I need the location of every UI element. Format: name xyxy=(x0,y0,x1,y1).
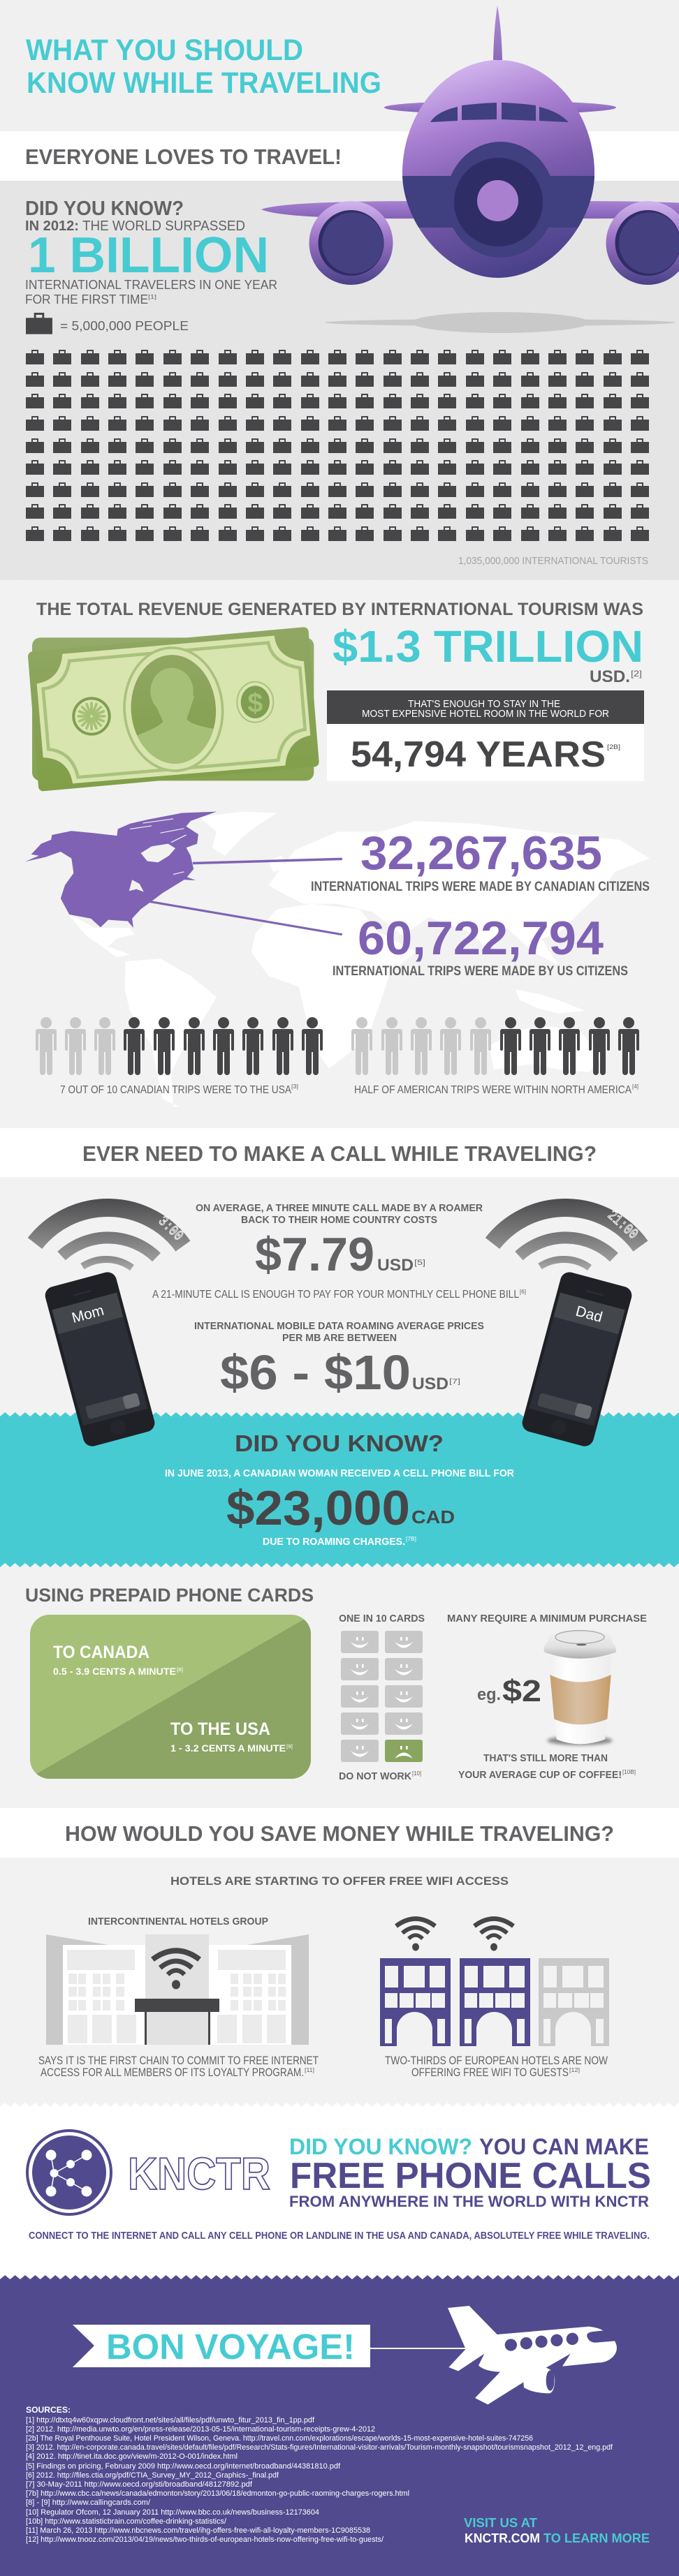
heading: total revenue: THE TOTAL REVENUE GENERATED BY INTERNATIONAL TOURISM WAS xyxy=(36,600,643,619)
caption: European hotels: [12] xyxy=(569,2067,580,2073)
icon: wifi over second building xyxy=(474,1918,513,1950)
panel: did you know roaming bill: CAD xyxy=(411,1507,455,1527)
pictogram: 7 of 10 Canadian trips xyxy=(36,1017,323,1075)
text: example price xyxy=(477,1674,541,1708)
text block: sources: [4] 2012. http://tinet.ita.doc.gov/view/m-2012-O-001/index.html xyxy=(26,2452,238,2461)
front bill xyxy=(33,632,314,787)
caption: intercontinental: [11] xyxy=(305,2067,314,2073)
chart: one in ten cards: DO NOT WORK xyxy=(339,1770,411,1782)
heading: everyone loves to travel: EVERYONE LOVES TO TRAVEL! xyxy=(25,145,342,169)
connector lines xyxy=(147,859,342,935)
chart caption: 1,035,000,000 INTERNATIONAL TOURISTS xyxy=(458,555,648,567)
title: WHAT YOU SHOULD xyxy=(26,34,303,67)
bill right seal xyxy=(237,682,273,723)
KNCTR wordmark: KNCTR xyxy=(128,2148,270,2199)
text block: sources: [11] March 26, 2013 http://www.nbcnews.com/travel/ihg-offers-free-wifi-all-loyalty-members-1C9085538 xyxy=(26,2526,370,2535)
bill left seal xyxy=(73,698,110,734)
callout: visit us: TO LEARN MORE xyxy=(543,2531,650,2545)
stat: US trips: 60,722,794 xyxy=(358,912,604,965)
airplane tail wings xyxy=(384,101,616,114)
chart: one in ten cards xyxy=(339,1613,425,1782)
caption: intercontinental: ACCESS FOR ALL MEMBERS OF ITS LOYALTY PROGRAM. xyxy=(41,2066,304,2079)
icon: left signal arcs: 3:00 xyxy=(154,1213,186,1245)
bill portrait xyxy=(119,643,228,776)
callout: free phone calls: DID YOU KNOW? xyxy=(289,2134,472,2159)
text: more than coffee: [10B] xyxy=(622,1769,636,1775)
heading: ever need to make a call: EVER NEED TO MAKE A CALL WHILE TRAVELING? xyxy=(82,1141,597,1166)
text block: sources: [2b] The Royal Penthouse Suite, Hotel President Wilson, Geneva. http://travel.cnn.com/explorations/escape/worlds-15-most-expensive-hotel-suites-747256 xyxy=(26,2434,533,2443)
icon: right signal arcs xyxy=(492,1208,641,1268)
map: world map with North America highlighted xyxy=(25,812,650,1107)
panel: prepaid card rates: [8] xyxy=(177,1668,183,1673)
text block: did you know 1 billion: [1] xyxy=(148,294,156,300)
text block: data roaming price: USD xyxy=(412,1375,448,1393)
airplane right engine xyxy=(606,201,679,285)
icon: coffee cup xyxy=(543,1629,616,1745)
panel: prepaid card rates: TO THE USA xyxy=(170,1719,270,1739)
panel: hotel room comparison: THAT'S ENOUGH TO STAY IN THE xyxy=(408,698,560,710)
callout: free phone calls: FREE PHONE CALLS xyxy=(290,2156,651,2196)
chart: European hotel buildings xyxy=(380,1958,609,2046)
panel: prepaid card rates: 0.5 - 3.9 CENTS A MINUTE xyxy=(53,1666,176,1677)
label: intercontinental: INTERCONTINENTAL HOTELS GROUP xyxy=(88,1916,268,1927)
heading: how would you save money: HOW WOULD YOU SAVE MONEY WHILE TRAVELING? xyxy=(65,1821,614,1846)
icon: suitcase legend xyxy=(26,313,52,334)
text block: data roaming price: [7] xyxy=(449,1378,460,1386)
North America highlight xyxy=(25,812,217,928)
revenue figure: $1.3 TRILLION xyxy=(333,621,643,672)
text block: did you know 1 billion: FOR THE FIRST TIME xyxy=(25,293,148,306)
text block: data roaming price: PER MB ARE BETWEEN xyxy=(282,1332,397,1344)
panel: hotel room comparison: 54,794 YEARS xyxy=(351,734,606,775)
icon: dollar bills xyxy=(32,632,314,787)
subheading: hotels wifi: HOTELS ARE STARTING TO OFFER FREE WIFI ACCESS xyxy=(170,1874,509,1888)
icon: KNCTR logo mark xyxy=(27,2131,111,2214)
heading: using prepaid phone cards: USING PREPAID PHONE CARDS xyxy=(25,1585,314,1606)
text block: three minute call cost: [5] xyxy=(414,1259,425,1267)
bill right seal: $ xyxy=(247,688,263,718)
banner tow line xyxy=(370,2348,468,2349)
text: more than coffee: THAT'S STILL MORE THAN xyxy=(483,1752,608,1764)
airplane shadow xyxy=(325,312,676,333)
text block: did you know 1 billion: THE WORLD SURPASSED xyxy=(82,219,245,234)
panel: hotel room comparison: [2B] xyxy=(607,743,620,750)
chart: one in ten cards: [10] xyxy=(412,1770,421,1777)
icon: sad card xyxy=(385,1740,423,1762)
panel: prepaid card rates: [9] xyxy=(286,1745,293,1749)
text block: sources: [5] Findings on pricing, February 2009 http://www.oecd.org/internet/broadband/44381810.pdf xyxy=(26,2462,341,2471)
icon: left signal arcs xyxy=(35,1208,186,1268)
panel: hotel room comparison xyxy=(327,690,644,781)
text block: data roaming price xyxy=(194,1320,484,1400)
caption: Canadian trips: 7 OUT OF 10 CANADIAN TRIPS WERE TO THE USA xyxy=(60,1084,291,1096)
icon: right phone xyxy=(520,1270,634,1449)
banner: bon voyage: BON VOYAGE! xyxy=(106,2327,355,2367)
text: example price: $2 xyxy=(502,1674,541,1708)
Hudson Bay, lakes and straits xyxy=(129,844,175,891)
text block: sources: SOURCES: xyxy=(26,2405,71,2415)
title: KNOW WHILE TRAVELING xyxy=(27,66,381,100)
caption: European hotels: OFFERING FREE WIFI TO GUESTS xyxy=(411,2066,569,2079)
icon: hotel wifi xyxy=(152,1950,200,1989)
text block: sources: [10] Regulator Ofcom, 12 January 2011 http://www.bbc.co.uk/news/business-12173604 xyxy=(26,2508,319,2517)
text block: did you know 1 billion: 1 BILLION xyxy=(28,228,269,283)
chart: grid of suitcases xyxy=(26,350,649,541)
text block: three minute call cost: $7.79 xyxy=(255,1228,374,1281)
text: minimum purchase: MANY REQUIRE A MINIMUM PURCHASE xyxy=(447,1613,647,1624)
stat: Canadian trips xyxy=(311,827,650,894)
text block: data roaming price: INTERNATIONAL MOBILE DATA ROAMING AVERAGE PRICES xyxy=(194,1320,484,1332)
hotel canopy xyxy=(135,1999,219,2045)
airplane main wings xyxy=(261,201,679,219)
airplane cockpit windows xyxy=(430,103,569,122)
panel: prepaid card rates xyxy=(28,1613,314,1782)
text block: sources: [7] 30-May-2011 http://www.oecd.org/sti/broadband/48127892.pdf xyxy=(26,2480,253,2489)
text block: sources: [3] 2012. http://en-corporate.canada.travel/sites/default/files/pdf/Research/Stats-figures/International-visitor-arrivals/Tourism-monthly-snapshot/tourismsnapshot_2012_12_eng.pdf xyxy=(26,2443,613,2452)
panel: did you know roaming bill xyxy=(165,1430,514,1548)
icon: right signal arcs: 21:00 xyxy=(604,1208,641,1243)
pictogram: half of American trips xyxy=(351,1017,639,1075)
stat: US trips: INTERNATIONAL TRIPS WERE MADE BY US CITIZENS xyxy=(333,964,628,979)
caption: European hotels: TWO-THIRDS OF EUROPEAN HOTELS ARE NOW xyxy=(385,2054,608,2067)
panel: did you know roaming bill: DID YOU KNOW? xyxy=(235,1430,444,1456)
caption: American trips: HALF OF AMERICAN TRIPS WERE WITHIN NORTH AMERICA xyxy=(354,1084,631,1096)
airplane left engine xyxy=(309,201,393,285)
text block: sources: [1] http://dtxtq4w60xqpw.cloudfront.net/sites/all/files/pdf/unwto_fitur_2013_fin_1pp.pdf xyxy=(26,2416,315,2425)
icon: wifi over first building xyxy=(396,1918,435,1950)
text block: three minute call cost xyxy=(152,1202,526,1301)
panel: prepaid card rates: TO CANADA xyxy=(53,1643,149,1662)
text block: sources: [2] 2012. http://media.unwto.org/en/press-release/2013-05-15/international-tourism-receipts-grew-4-2012 xyxy=(26,2425,375,2434)
panel: prepaid card rates: 1 - 3.2 CENTS A MINUTE xyxy=(170,1742,286,1754)
text block: three minute call cost: A 21-MINUTE CALL IS ENOUGH TO PAY FOR YOUR MONTHLY CELL PHONE BILL xyxy=(152,1289,519,1301)
text block: did you know 1 billion: INTERNATIONAL TRAVELERS IN ONE YEAR xyxy=(25,278,277,292)
caption: European hotels xyxy=(385,2054,608,2079)
legend label: = 5,000,000 PEOPLE xyxy=(60,319,189,333)
text: more than coffee xyxy=(458,1752,636,1781)
icon: left phone xyxy=(43,1270,156,1449)
callout: visit us: VISIT US AT xyxy=(464,2516,537,2530)
icon: large purple airplane, front view xyxy=(261,6,679,333)
icon: left phone: Mom xyxy=(70,1303,105,1326)
chart: one in ten cards: ONE IN 10 CARDS xyxy=(339,1613,425,1624)
airplane tail fin xyxy=(493,6,502,60)
callout: free phone calls: FROM ANYWHERE IN THE WORLD WITH KNCTR xyxy=(289,2193,649,2210)
callout: visit us: KNCTR.COM xyxy=(465,2531,540,2545)
caption: Canadian trips: [3] xyxy=(291,1083,298,1090)
text block: sources: [6] 2012. http://files.ctia.org/pdf/CTIA_Survey_MY_2012_Graphics-_final.pdf xyxy=(26,2471,279,2480)
panel: did you know roaming bill: [7B] xyxy=(406,1536,416,1542)
caption: American trips: [4] xyxy=(632,1083,638,1090)
text block: three minute call cost: USD xyxy=(377,1256,414,1275)
title xyxy=(26,34,381,100)
revenue figure: USD. xyxy=(590,667,630,686)
revenue figure: [2] xyxy=(631,669,642,679)
text block: three minute call cost: [6] xyxy=(520,1289,526,1295)
text block: three minute call cost: BACK TO THEIR HOME COUNTRY COSTS xyxy=(241,1214,437,1226)
text block: sources: [12] http://www.tnooz.com/2013/04/19/news/two-thirds-of-european-hotels-now-offering-free-wifi-to-guests/ xyxy=(26,2536,384,2544)
text block: sources: [7b] http://www.cbc.ca/news/canada/edmonton/story/2013/06/18/edmonton-go-public-raoming-charges-rogers.html xyxy=(26,2489,409,2498)
icon: intercontinental hotel xyxy=(46,1934,309,2045)
panel: hotel room comparison: MOST EXPENSIVE HOTEL ROOM IN THE WORLD FOR xyxy=(362,708,609,720)
text: example price: eg. xyxy=(477,1685,501,1704)
callout: free phone calls xyxy=(289,2134,651,2210)
back bill xyxy=(32,637,314,780)
caption: intercontinental xyxy=(38,2054,319,2079)
icon: white airplane xyxy=(448,2306,617,2404)
text block: three minute call cost: ON AVERAGE, A THREE MINUTE CALL MADE BY A ROAMER xyxy=(196,1202,483,1214)
text block: did you know 1 billion: IN 2012: xyxy=(25,219,79,234)
airplane fuselage xyxy=(398,60,601,279)
stat: US trips xyxy=(333,912,628,979)
text block: did you know 1 billion: DID YOU KNOW? xyxy=(25,198,184,220)
icon: right phone: Dad xyxy=(574,1303,604,1326)
text block: sources: [10b] http://www.statisticbrain.com/coffee-drinking-statistics/ xyxy=(26,2517,227,2526)
callout: free phone calls: YOU CAN MAKE xyxy=(479,2134,649,2159)
text block: sources xyxy=(26,2405,613,2544)
callout: visit us xyxy=(464,2516,650,2545)
panel: did you know roaming bill: DUE TO ROAMING CHARGES. xyxy=(263,1536,405,1548)
text block: data roaming price: $6 - $10 xyxy=(220,1345,411,1400)
world landmasses xyxy=(67,812,650,1107)
text block: sources: [8] - [9] http://www.callingcards.com/ xyxy=(26,2499,151,2507)
text: more than coffee: YOUR AVERAGE CUP OF COFFEE! xyxy=(458,1769,622,1781)
panel: did you know roaming bill: IN JUNE 2013, A CANADIAN WOMAN RECEIVED A CELL PHONE BILL FOR xyxy=(165,1467,514,1479)
caption: intercontinental: SAYS IT IS THE FIRST CHAIN TO COMMIT TO FREE INTERNET xyxy=(38,2054,319,2067)
stat: Canadian trips: 32,267,635 xyxy=(360,827,602,880)
panel: did you know roaming bill: $23,000 xyxy=(226,1481,410,1535)
text block: did you know 1 billion xyxy=(25,198,277,306)
